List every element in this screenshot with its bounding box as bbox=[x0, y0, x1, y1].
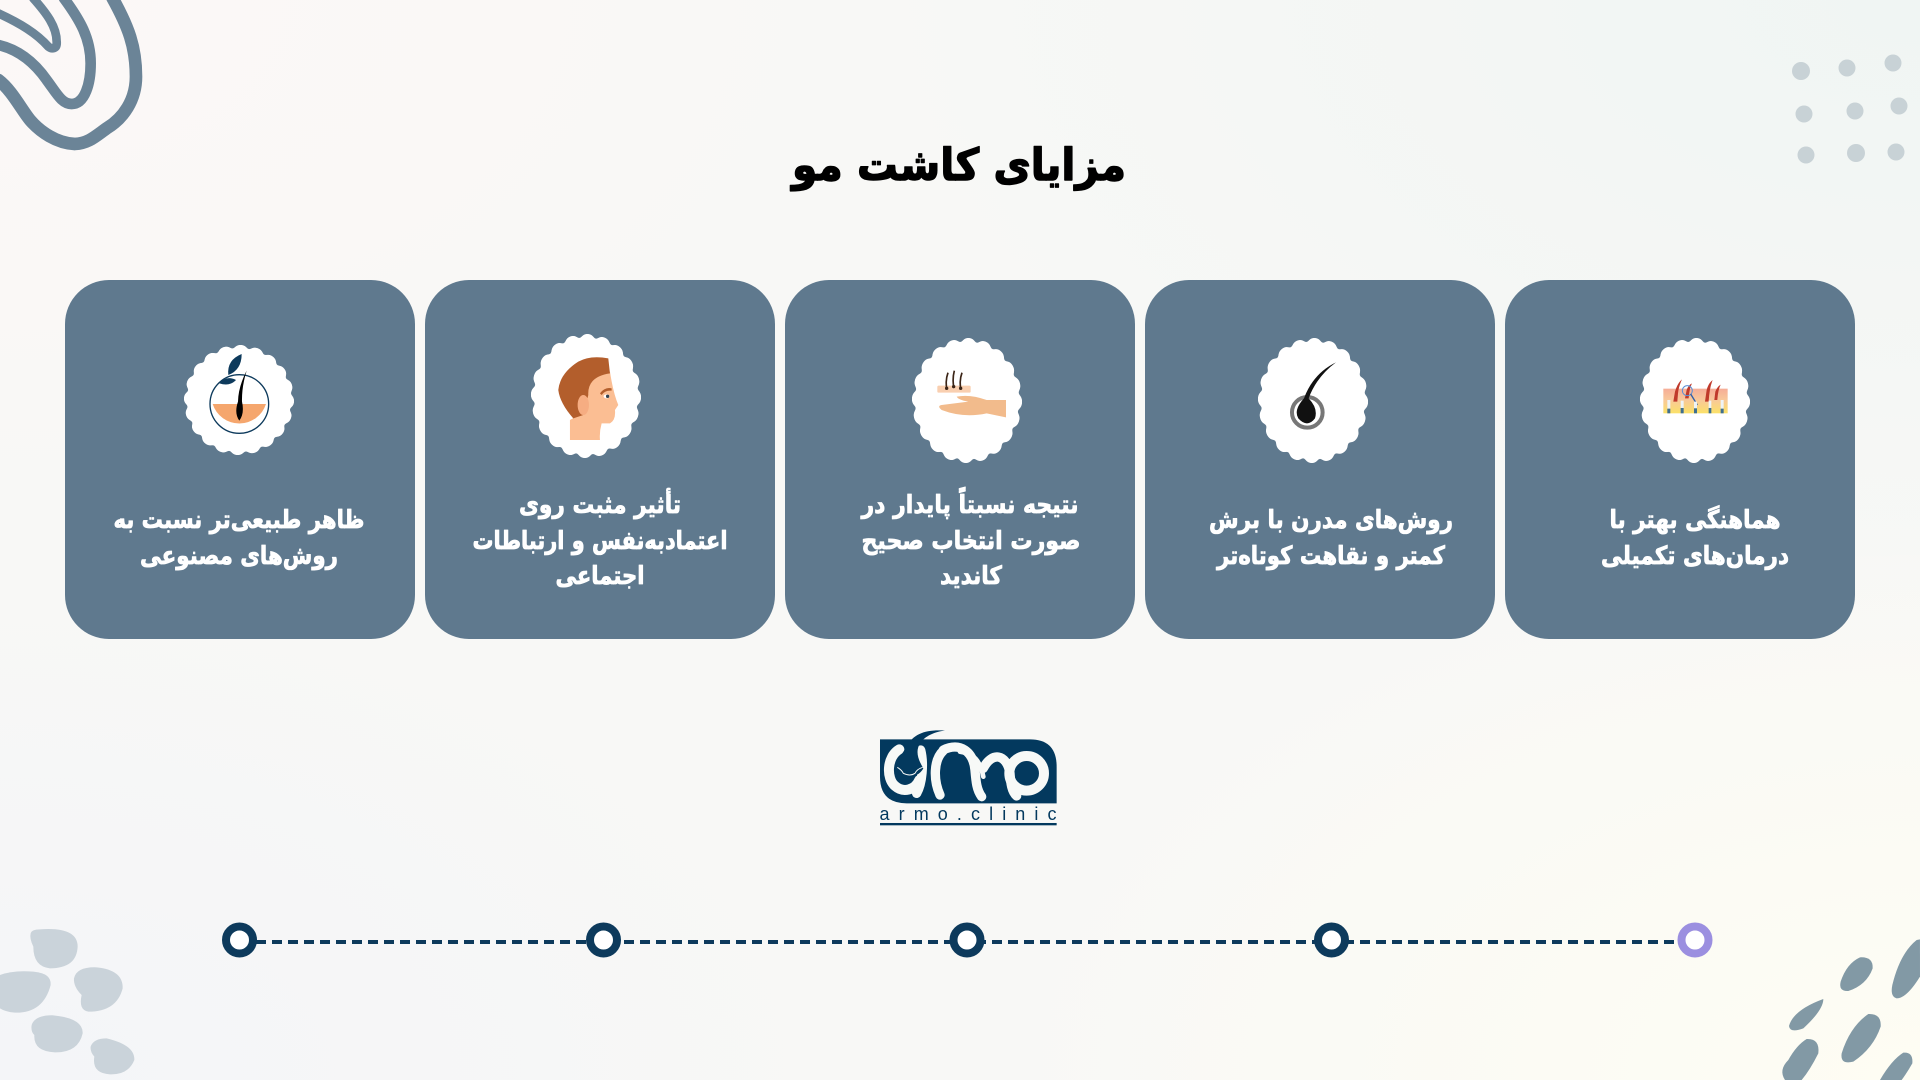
panel: natural look bbox=[65, 280, 415, 639]
icon: hair follicle with leaves bbox=[190, 351, 288, 449]
text: confidence: اجتماعی bbox=[556, 561, 644, 590]
icon: hand with hair graft bbox=[918, 345, 1016, 456]
text: confidence: تأثیر مثبت روی bbox=[519, 488, 681, 520]
logo: armo clinic bbox=[880, 730, 1057, 825]
text: stable result: کاندید bbox=[940, 561, 1002, 590]
text: complementary treatments bbox=[1601, 505, 1789, 570]
text: stable result: صورت انتخاب صحیح bbox=[862, 526, 1080, 556]
decoration: bottom-right strokes bbox=[1782, 939, 1920, 1080]
text: confidence: اعتمادبه‌نفس و ارتباطات bbox=[472, 526, 728, 556]
panel: complementary treatments bbox=[1505, 280, 1855, 639]
decoration: top-right dots bbox=[1792, 54, 1908, 164]
icon: man profile bbox=[537, 341, 635, 451]
title: مزایای کاشت مو bbox=[790, 140, 1126, 191]
timeline bbox=[226, 926, 1708, 954]
panel: stable result bbox=[785, 280, 1135, 639]
text: natural look: روش‌های مصنوعی bbox=[140, 541, 338, 571]
node 4 bbox=[1318, 926, 1345, 954]
panel: confidence bbox=[425, 280, 775, 639]
text: stable result bbox=[860, 487, 1080, 590]
text: natural look: ظاهر طبیعی‌تر نسبت به bbox=[114, 505, 364, 535]
text: complementary treatments: درمان‌های تکمیلی bbox=[1601, 541, 1789, 570]
node 2 bbox=[590, 926, 617, 954]
text: confidence bbox=[472, 488, 728, 590]
node 1 bbox=[226, 926, 253, 954]
text: complementary treatments: هماهنگی بهتر با bbox=[1610, 505, 1780, 535]
text: natural look bbox=[114, 505, 364, 571]
text: modern methods bbox=[1209, 505, 1453, 571]
text: modern methods: روش‌های مدرن با برش bbox=[1209, 505, 1453, 535]
text: stable result: نتیجه نسبتاً پایدار در bbox=[860, 487, 1078, 519]
node 5: active bbox=[1682, 926, 1708, 954]
text: modern methods: کمتر و نقاهت کوتاه‌تر bbox=[1215, 541, 1445, 571]
icon: hair strand bbox=[1264, 345, 1362, 456]
node 3 bbox=[954, 926, 980, 954]
decoration: top-left swirl bbox=[0, 0, 136, 144]
icon: skin cross-section bbox=[1646, 345, 1744, 456]
logo: armo clinic: armo.clinic bbox=[880, 804, 1056, 824]
panel: modern methods bbox=[1145, 280, 1495, 639]
decoration: bottom-left blobs bbox=[0, 929, 134, 1074]
